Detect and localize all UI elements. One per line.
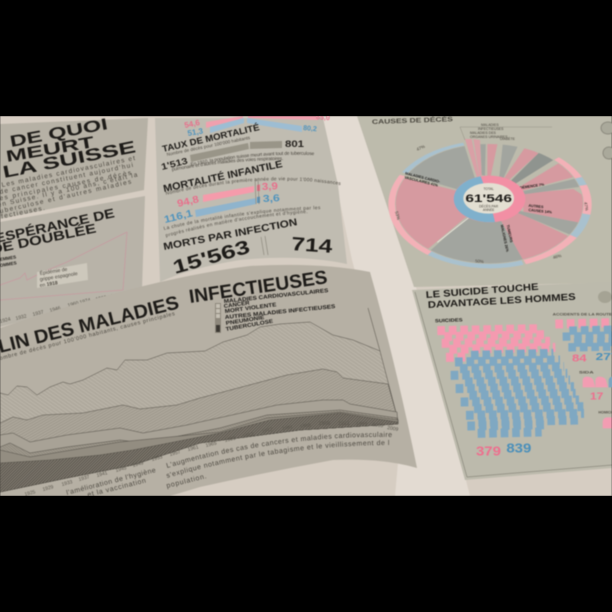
wedge labels: AUTRES <box>528 204 544 209</box>
heading left: LIN DES MALADIES <box>0 293 181 358</box>
value: women suicides: 379 <box>476 445 501 459</box>
bars: mortalité infantile <box>163 178 281 226</box>
panel: le suicide touche davantage les hommes <box>412 282 612 480</box>
value 2013: 714 <box>291 234 334 258</box>
heading line 2: DAVANTAGE LES HOMMES <box>428 292 576 311</box>
top bars: espérance values: 80,2 <box>303 125 317 133</box>
bars: mortalité infantile: 116,1 <box>163 208 194 226</box>
seats: men road accidents <box>563 330 612 347</box>
icons top right <box>601 122 612 159</box>
x axis years: 1985 <box>300 423 311 430</box>
x axis years: 1937 <box>32 309 44 318</box>
legend: TUBERCULOSE <box>225 319 274 333</box>
total value: ANNÉE <box>483 207 495 212</box>
x axis years: 1957 <box>169 449 181 458</box>
total value <box>465 187 512 212</box>
x axis years: 2009 <box>387 425 399 433</box>
wedges <box>348 122 612 328</box>
bars: taux de mortalité <box>160 139 305 172</box>
heading line 1: LE SUICIDE TOUCHE <box>425 282 539 301</box>
x axis years: 1969 <box>224 436 237 444</box>
wedge labels: 47% <box>416 144 426 152</box>
value: men suicides: 839 <box>506 442 531 456</box>
x axis years: 1974 <box>79 297 91 306</box>
center hub ring: blue <box>454 176 495 222</box>
x axis years: 1929 <box>42 484 54 493</box>
wedge labels: CAUSES 14% <box>528 208 553 215</box>
text: tuberculose: pulmonaire et d'autres maladies des voies respiratoires. <box>171 156 283 172</box>
stacked area chart <box>0 322 398 492</box>
wedges gap <box>395 143 584 264</box>
intro text: de cancer constituent aujourd'hui <box>0 162 134 196</box>
wedge labels: 46% <box>552 253 562 260</box>
annotation: grippe espagnole: Épidémie de <box>39 266 68 277</box>
annotation: grippe espagnole: grippe espagnole <box>39 271 78 283</box>
text: hygiène: et la vaccination <box>87 478 147 499</box>
x axis years: 1981 <box>281 424 294 432</box>
top legend: DIABÈTE <box>500 136 516 141</box>
panel border <box>415 292 612 477</box>
intro text <box>0 155 139 222</box>
x axis years: 1932 <box>15 313 27 322</box>
x axis years: 1993 <box>338 421 349 427</box>
gutter highlight <box>322 116 470 496</box>
legend <box>215 288 336 333</box>
x axis years: 1960 <box>67 300 79 309</box>
wedge separator <box>437 217 470 242</box>
area: autres maladies infectieuses <box>0 409 398 456</box>
top legend: INFECTIEUSES <box>478 127 504 131</box>
subtitle: Nombre de décès pour 100'000 habitants <box>166 135 251 157</box>
top legend: MALADIES <box>481 123 499 127</box>
bars: mortalité infantile: 94,8 <box>176 194 201 210</box>
x axis years: 1945 <box>115 465 127 474</box>
wedge labels: 53% <box>394 211 401 220</box>
top bars: espérance values: 51,3 <box>187 126 204 138</box>
total value: DÉCÈS PAR <box>479 203 499 208</box>
total value: TOTAL <box>483 187 494 191</box>
text: hygiène: l'amélioration de l'hygiène <box>66 467 157 497</box>
area: maladies cardiovasculaires <box>0 321 396 422</box>
x axis years <box>0 295 106 324</box>
text: chute de la mortalité: progrès réalisés en matière d'accouchement et d'hygiène. <box>165 210 308 238</box>
bars: taux de mortalité: 1'513 <box>160 156 189 172</box>
center hub <box>463 183 514 214</box>
page background <box>0 116 612 496</box>
seat: homicides <box>603 417 612 428</box>
wedge labels: 47% <box>583 202 589 211</box>
x axis years: 1988 <box>95 295 108 303</box>
wedge labels: MALIGNES 26% <box>500 224 510 253</box>
seats: men suicides <box>451 353 584 433</box>
text: chute de la mortalité: La chute de la mortalité infantile s'explique notamment par les <box>163 206 321 230</box>
text: cancers <box>166 431 392 490</box>
heading right: INFECTIEUSES <box>188 267 329 308</box>
top slivers <box>465 139 482 177</box>
legend: AUTRES MALADIES INFECTIEUSES <box>225 304 336 321</box>
x axis years: 1933 <box>61 479 73 488</box>
heading: morts par infection: MORTS PAR INFECTION <box>163 217 298 253</box>
legend: MORT VIOLENTE <box>224 302 277 315</box>
wedge labels <box>394 144 589 264</box>
label: suicides: SUICIDES <box>435 317 463 323</box>
x axis years: 1949 <box>132 460 144 469</box>
x axis years: 1977 <box>261 427 274 435</box>
heading: la Suisse: LA SUISSE <box>1 137 137 182</box>
year divider <box>261 236 268 255</box>
text: tuberculose <box>171 151 314 172</box>
bars: mortalité infantile: 3,6 <box>263 193 281 205</box>
legend: CANCER <box>223 300 250 310</box>
panel: mortalité <box>155 116 347 282</box>
donut chart <box>348 115 612 348</box>
seats: women road accidents <box>555 323 612 324</box>
annotation: grippe espagnole <box>37 263 88 289</box>
outer ring <box>358 115 612 348</box>
heading: taux de mortalité: TAUX DE MORTALITÉ <box>161 122 260 154</box>
intro text: Les maladies cardiovasculaires et <box>1 155 136 189</box>
intro text: en Suisse. Il y a 100 ans, c'était la <box>0 172 139 209</box>
legend: MALADIES CARDIOVASCULAIRES <box>224 288 329 305</box>
x axis years: 1925 <box>24 489 36 498</box>
text: cancers: population. <box>166 473 207 490</box>
x axis years: 1941 <box>96 470 108 479</box>
bars: taux de mortalité: 801 <box>285 139 305 150</box>
value: women road accidents: 84 <box>572 353 587 364</box>
heading: de quoi: DE QUOI <box>9 116 109 151</box>
label: accidents de la route: ACCIDENTS DE LA ROUTE <box>553 313 612 317</box>
panel: espérance de vie <box>0 196 145 327</box>
x axis years: 1989 <box>319 420 330 427</box>
x axis years: 2002 <box>110 292 123 300</box>
bars: mortalité infantile: 3,9 <box>262 181 279 193</box>
seats chart <box>435 313 612 459</box>
x axis years: 1953 <box>151 454 163 463</box>
top legend: MALADIES DES <box>470 131 497 135</box>
x axis years: 2005 <box>372 422 384 429</box>
panel: de quoi meurt la Suisse <box>0 116 148 222</box>
value 1950: 15'563 <box>171 237 252 279</box>
area: mort violente <box>0 399 398 442</box>
x axis years: 1997 <box>356 421 368 428</box>
total value: 61'546 <box>465 193 512 205</box>
heading: mortalité infantile: MORTALITÉ INFANTILE <box>162 157 284 195</box>
area: cancer <box>0 368 396 442</box>
area: pneumonie <box>0 412 398 492</box>
x axis years <box>24 420 399 498</box>
wedge labels: VASCULAIRES 41% <box>404 175 439 188</box>
legend: PNEUMONIE <box>225 315 265 327</box>
subtitle: Nombre de décès durant la première année de vie pour 1'000 naissances <box>165 176 341 195</box>
panel: déclin des maladies infectieuses <box>0 264 418 496</box>
wedge labels: 50% <box>475 258 484 264</box>
top legend <box>460 123 552 141</box>
top legend: ORGANES URINAIRES <box>470 135 508 139</box>
annotation: grippe espagnole: en 1918 <box>39 280 58 289</box>
top bars: espérance values: 85,0 <box>316 114 330 122</box>
wedge labels: TUMEURS <box>506 224 513 243</box>
text: cancers: s'explique notamment par le tabagisme et le vieillissement de la <box>166 440 390 478</box>
heading: meurt: MEURT <box>5 134 96 166</box>
x axis years: 1946 <box>49 305 61 314</box>
x axis years: 1937 <box>78 474 90 483</box>
wedge labels: MALADIES CARDIO- <box>405 171 441 184</box>
x axis years: 1965 <box>205 440 217 449</box>
top bars: espérance values <box>184 116 330 136</box>
seats: women suicides <box>437 329 555 357</box>
x axis years: 1973 <box>242 432 255 440</box>
text: tuberculose: En 1910, la population suisse meurt avant tout de tuberculose <box>190 151 314 166</box>
seats: sida <box>583 377 612 387</box>
chart right axis <box>368 308 380 351</box>
chart subtitle: ombre de décès pour 100'000 habitants, causes principales <box>0 311 176 362</box>
value: sida: 17 <box>590 391 604 402</box>
area: tuberculose <box>0 413 398 492</box>
icon: small figure <box>598 291 612 303</box>
life expectancy chart lines <box>0 232 127 300</box>
panel: causes de décès <box>348 114 612 348</box>
photograph of magazine spread <box>0 116 612 496</box>
x axis years: 1961 <box>187 444 199 453</box>
text: cancers: L'augmentation des cas de cancers et maladies cardiovasculaires <box>166 431 392 468</box>
top bars: espérance values: 54,6 <box>184 118 201 130</box>
wedge labels: DÉMENCE 7% <box>519 182 545 190</box>
label: sida: SIDA <box>579 371 594 375</box>
heading: causes de décès: CAUSES DE DÉCÈS <box>372 114 454 126</box>
center hub ring: pink <box>453 176 525 222</box>
value: men road accidents: 277 <box>596 352 612 363</box>
